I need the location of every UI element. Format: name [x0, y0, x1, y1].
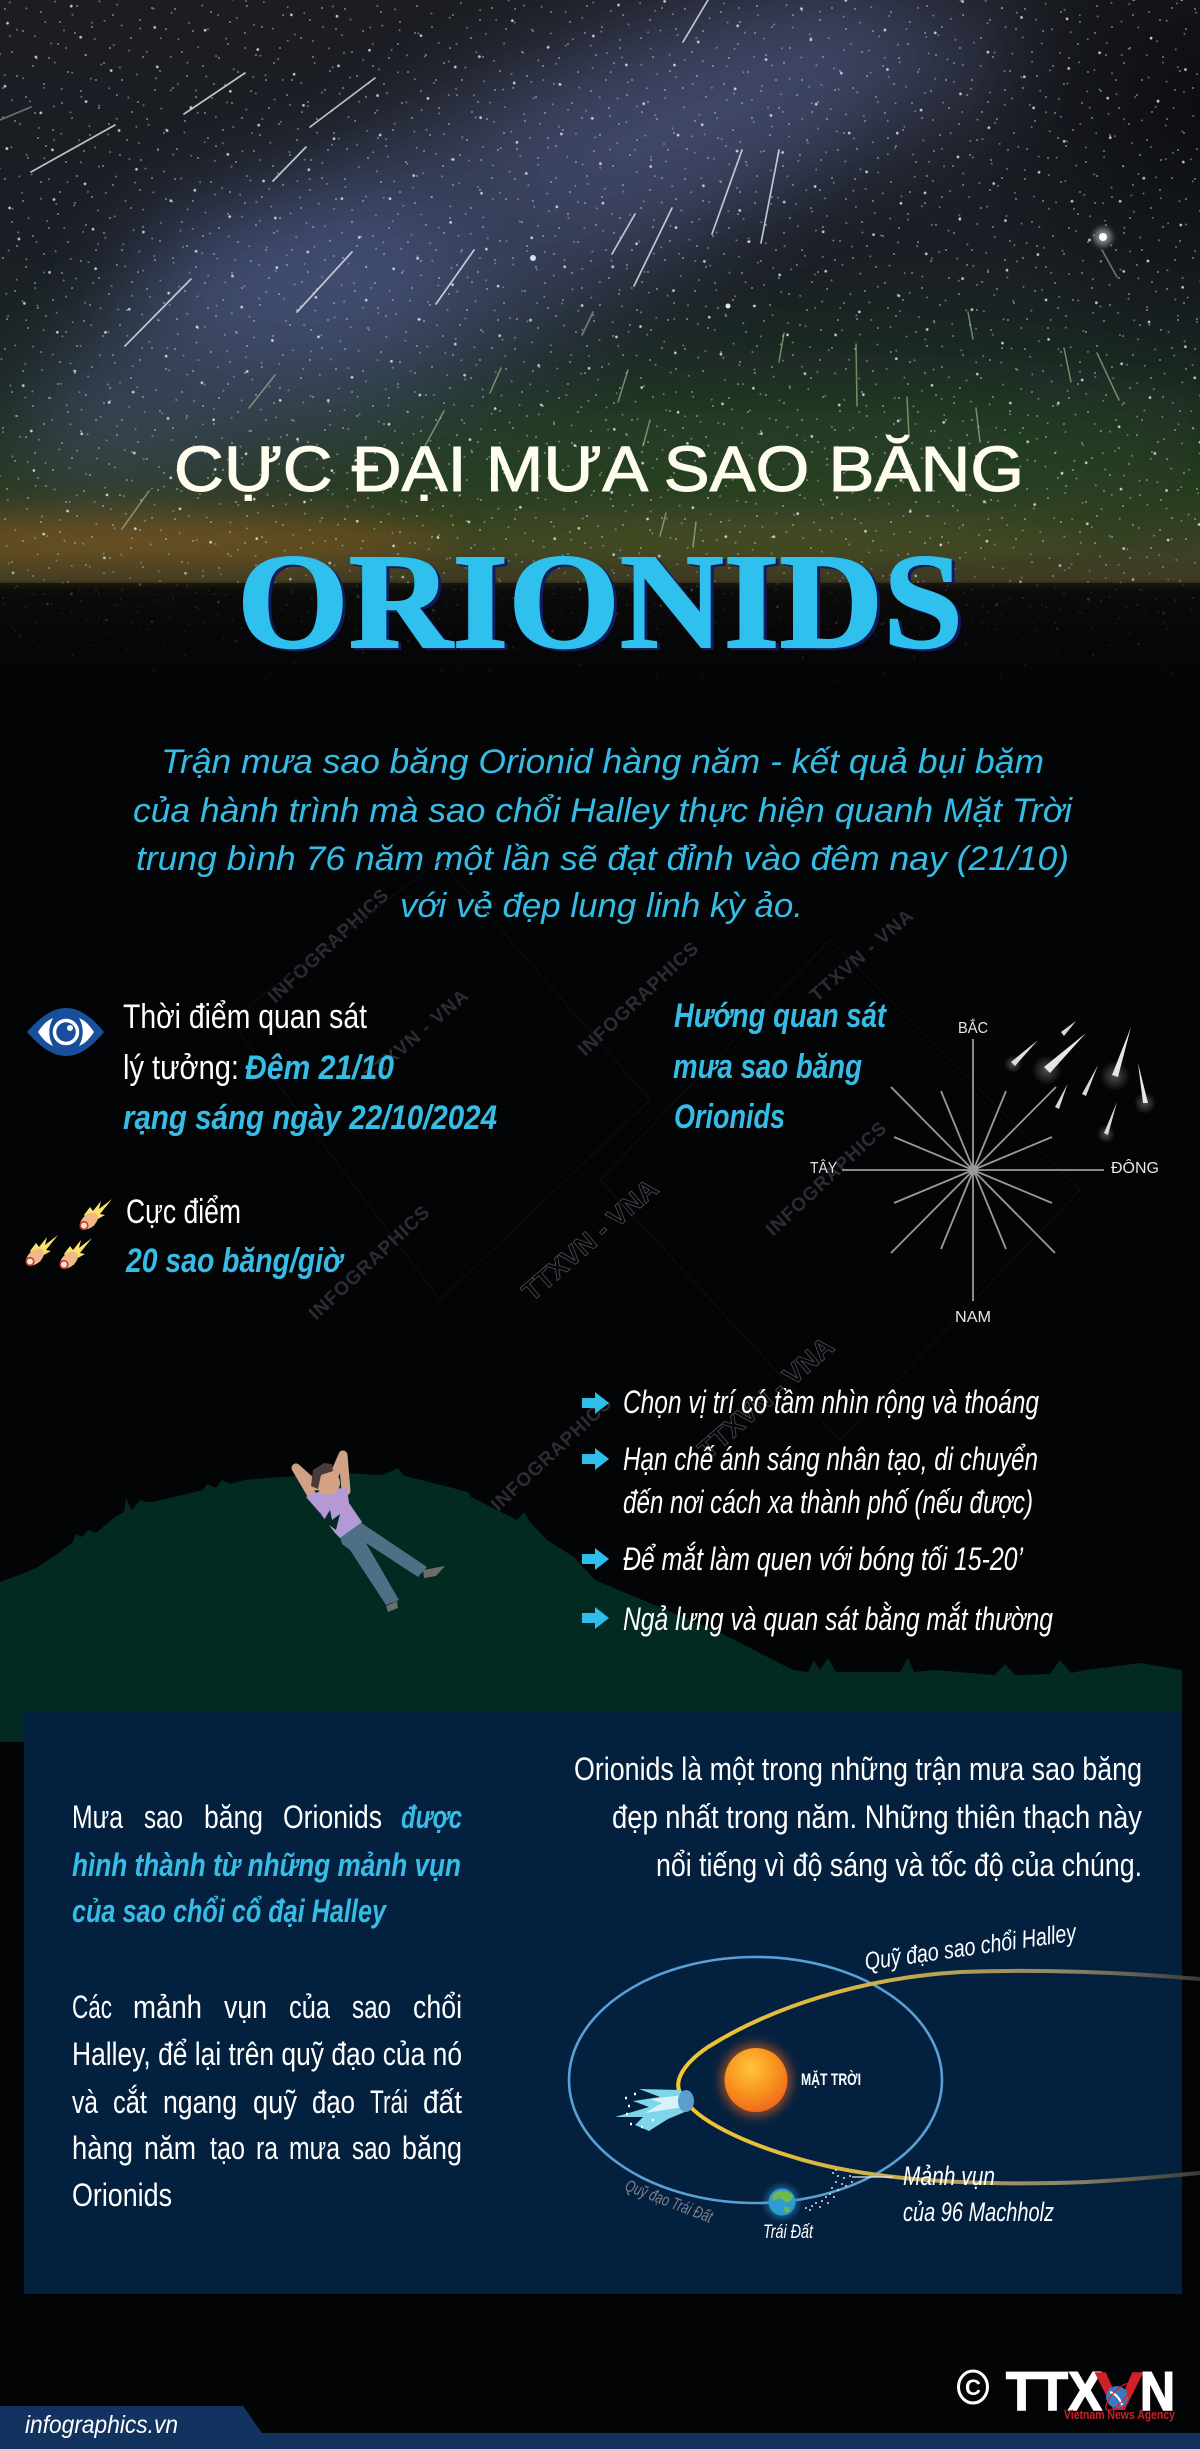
watermarks: INFOGRAPHICS — [574, 938, 704, 1061]
compass labels — [810, 1018, 1159, 1326]
hill — [0, 1468, 1182, 1742]
logo: TTXVN: N — [1140, 2360, 1175, 2422]
left text: debris explanation: Halley, để lại trên quỹ đạo của nó — [72, 2036, 462, 2072]
label: debris of 96 Machholz: Mảnh vụn — [903, 2161, 995, 2191]
arms — [296, 1455, 346, 1497]
left text: debris explanation: mảnh — [133, 1989, 202, 2025]
starry sky photo — [0, 0, 1200, 700]
text: peak rate: 20 sao băng/giờ — [125, 1242, 345, 1280]
watermarks: TTXVN - VNA — [361, 985, 473, 1086]
heading: viewing direction: mưa sao băng — [673, 1048, 862, 1086]
person lying on the hill — [296, 1455, 445, 1612]
compass labels: NAM — [955, 1309, 991, 1326]
intro paragraph: của hành trình mà sao chổi Halley thực hiện quanh Mặt Trời — [133, 792, 1073, 830]
left text: debris explanation: tạo — [210, 2130, 245, 2166]
left text: debris explanation: ngang — [163, 2084, 237, 2120]
left text: debris explanation: sao — [352, 1989, 391, 2025]
footer band — [0, 2406, 1200, 2449]
left text: origin highlight: được — [401, 1799, 462, 1835]
left text: debris explanation: ra — [256, 2130, 278, 2166]
tip 2: Hạn chế ánh sáng nhân tạo, di chuyển — [623, 1441, 1038, 1477]
left text: origin highlight: sao — [144, 1799, 183, 1835]
tip 1: Chọn vị trí có tầm nhìn rộng và thoáng — [623, 1384, 1039, 1420]
left text: debris explanation: Các — [72, 1989, 112, 2025]
earth — [765, 2185, 799, 2219]
intro paragraph: Trận mưa sao băng Orionid hàng năm - kết quả bụi bặm — [161, 743, 1044, 781]
right text: description — [574, 1751, 1142, 1883]
tip 2 — [582, 1441, 1038, 1520]
left text: debris explanation: băng — [402, 2130, 462, 2166]
heading: viewing direction: Orionids — [674, 1098, 785, 1136]
observation time block — [27, 998, 497, 1137]
compass labels: BẮC — [958, 1018, 988, 1037]
sun — [720, 2043, 792, 2117]
jeans — [340, 1522, 427, 1605]
tips list — [582, 1384, 1053, 1637]
watermarks — [264, 885, 918, 1516]
icon: eye — [27, 1008, 104, 1056]
meteor streaks — [1004, 1021, 1156, 1143]
compass labels: TÂY — [810, 1158, 837, 1177]
left text: origin highlight — [72, 1799, 462, 1929]
icon: meteors — [23, 1199, 112, 1272]
logo: TTXVN: TTX — [1006, 2360, 1102, 2422]
label: sun: MẶT TRỜI — [801, 2070, 861, 2089]
left text: debris explanation: Orionids — [72, 2177, 172, 2213]
watermarks: INFOGRAPHICS — [305, 1202, 435, 1325]
left text: debris explanation: năm — [144, 2130, 196, 2166]
left text: debris explanation: mưa — [289, 2130, 340, 2166]
logo: TTXVN: Vietnam News Agency — [1064, 2408, 1175, 2422]
intro paragraph: trung bình 76 năm một lần sẽ đạt đỉnh vào đêm nay (21/10) — [136, 840, 1069, 878]
comet orbit — [678, 1971, 1200, 2183]
text: peak rate: Cực điểm — [126, 1193, 241, 1231]
tip 3: Để mắt làm quen với bóng tối 15-20’ — [623, 1541, 1024, 1577]
logo: TTXVN — [958, 2360, 1175, 2422]
compass diagram — [810, 1018, 1159, 1326]
left text: origin highlight: hình thành từ những mảnh vụn — [72, 1847, 461, 1883]
head — [316, 1471, 340, 1495]
left text: debris explanation: hàng — [72, 2130, 133, 2166]
left text: origin highlight: Orionids — [283, 1799, 382, 1835]
watermarks: INFOGRAPHICS — [264, 885, 394, 1008]
text: peak rate — [125, 1193, 345, 1280]
text: ideal time: Thời điểm quan sát — [123, 998, 367, 1036]
watermarks: TTXVN - VNA — [806, 905, 918, 1006]
grass over shirt — [320, 1510, 340, 1530]
earth orbit — [569, 1957, 942, 2203]
tip 2: đến nơi cách xa thành phố (nếu được) — [623, 1484, 1033, 1520]
logo: TTXVN: C — [965, 2375, 981, 2400]
left text: debris explanation: vụn — [224, 1989, 267, 2025]
title: cực đại mưa sao băng: CỰC ĐẠI MƯA SAO BĂNG — [174, 433, 1024, 505]
orbit diagram — [569, 1918, 1200, 2243]
tip 4: Ngả lưng và quan sát bằng mắt thường — [623, 1601, 1053, 1637]
watermarks: TTXVN - VNA — [692, 1331, 840, 1465]
watermarks: INFOGRAPHICS — [487, 1393, 617, 1516]
left text: origin highlight: băng — [204, 1799, 263, 1835]
left text: debris explanation: của — [289, 1989, 330, 2025]
text: ideal time: Đêm 21/10 — [245, 1049, 394, 1087]
shoes — [423, 1566, 445, 1578]
title: Orionids: ORIONIDS — [240, 529, 966, 679]
peak rate block — [23, 1193, 345, 1280]
debris dots — [806, 2170, 852, 2210]
left text: debris explanation: chổi — [413, 1989, 462, 2025]
comet — [615, 2089, 694, 2131]
label: Earth: Trái Đất — [763, 2222, 814, 2243]
compass labels: ĐÔNG — [1111, 1158, 1159, 1177]
hair — [311, 1463, 333, 1489]
left text: debris explanation: cắt — [113, 2084, 147, 2120]
shirt — [306, 1488, 362, 1538]
left text: debris explanation: đạo — [312, 2084, 355, 2120]
panel: Halley explanation — [24, 1712, 1182, 2294]
left text: debris explanation: sao — [352, 2130, 391, 2166]
label: debris of 96 Machholz — [903, 2161, 1054, 2227]
heading: viewing direction: Hướng quan sát — [674, 997, 887, 1035]
left text: debris explanation: đất — [423, 2084, 462, 2120]
footer site name: infographics.vn — [25, 2411, 178, 2439]
left text: debris explanation: và — [72, 2084, 98, 2120]
label: Earth orbit: Quỹ đạo Trái Đất — [623, 2176, 716, 2227]
label: debris leader line — [852, 2176, 893, 2178]
text: ideal time: rạng sáng ngày 22/10/2024 — [123, 1099, 497, 1137]
left text: debris explanation: quỹ — [253, 2084, 297, 2120]
intro paragraph: với vẻ đẹp lung linh kỳ ảo. — [400, 887, 803, 925]
label: debris of 96 Machholz: của 96 Machholz — [903, 2197, 1054, 2227]
left text: debris explanation: Trái — [370, 2084, 408, 2120]
text: ideal time: lý tưởng: — [123, 1049, 239, 1087]
left text: origin highlight: của sao chổi cổ đại Halley — [72, 1893, 388, 1929]
text: ideal time — [123, 998, 497, 1137]
watermarks: INFOGRAPHICS — [762, 1118, 892, 1241]
left text: origin highlight: Mưa — [72, 1799, 123, 1835]
title: Orionids: ORIONIDS — [237, 527, 963, 677]
intro paragraph — [133, 743, 1073, 925]
left text: debris explanation — [72, 1989, 462, 2213]
logo: TTXVN: V — [1094, 2360, 1144, 2422]
watermarks: TTXVN - VNA — [516, 1173, 664, 1307]
heading: viewing direction — [673, 997, 887, 1136]
label: Halley orbit: Quỹ đạo sao chổi Halley — [863, 1918, 1079, 1976]
